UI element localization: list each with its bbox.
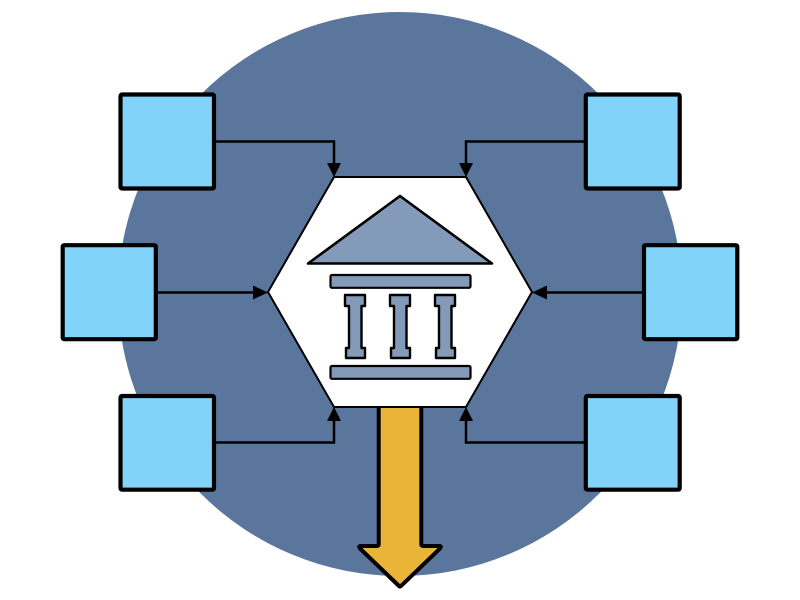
- roof: [308, 196, 492, 264]
- icon: bank building: [308, 196, 492, 379]
- background circle: [118, 12, 682, 576]
- arrow: top left: [216, 142, 341, 177]
- base: [330, 366, 470, 379]
- arrow: middle right: [532, 286, 643, 300]
- box: middle left: [63, 245, 156, 339]
- column middle: [390, 295, 410, 358]
- output arrow: [359, 405, 441, 586]
- box: top left: [120, 94, 214, 188]
- box: bottom left: [120, 396, 214, 490]
- central hexagon: [268, 177, 532, 407]
- box: middle right: [644, 245, 737, 339]
- arrow: bottom right: [459, 407, 584, 442]
- column right: [435, 295, 455, 358]
- box: top right: [586, 94, 680, 188]
- arrow: middle left: [157, 286, 268, 300]
- entablature: [330, 275, 470, 288]
- arrow: top right: [459, 142, 584, 177]
- column left: [345, 295, 365, 358]
- arrow: bottom left: [216, 407, 341, 442]
- box: bottom right: [586, 396, 680, 490]
